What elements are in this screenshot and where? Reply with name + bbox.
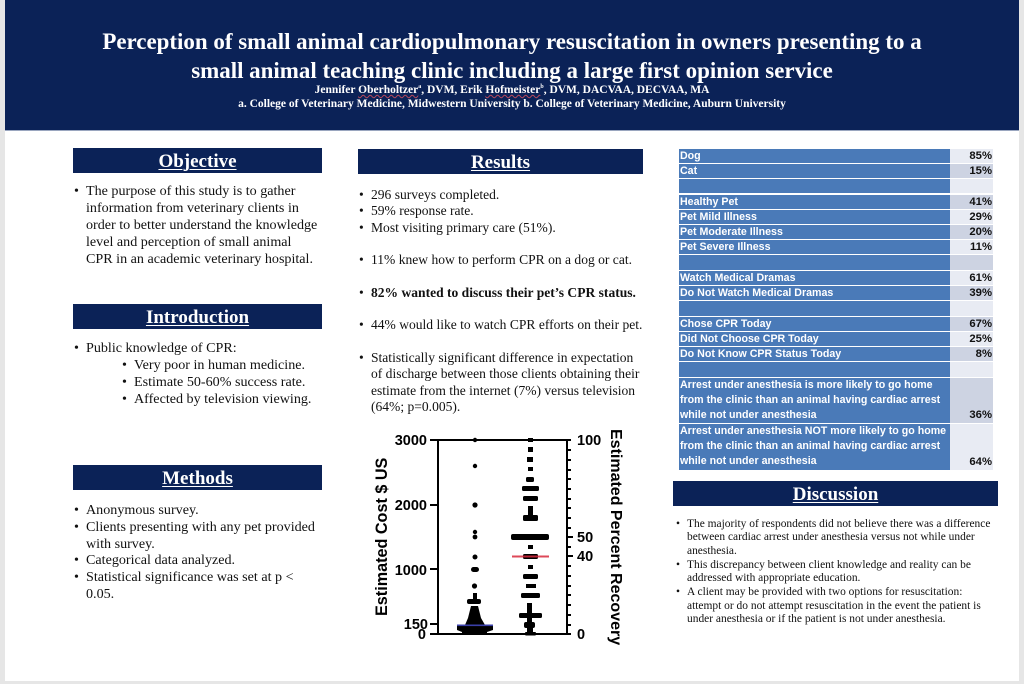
table: survey percentages: 20% [969,226,992,238]
table: survey percentages: Healthy Pet [680,196,738,208]
results text: 296 surveys completed. [371,187,499,202]
results text: 59% response rate. [371,203,474,218]
right axis numbers: 0 [577,627,585,643]
left axis title: Estimated Cost $ US [373,457,391,616]
discussion text [676,518,990,625]
heading: introduction [73,304,322,329]
axes [430,440,573,634]
methods text: Clients presenting with any pet provided [86,519,315,535]
introduction text: • [122,357,127,373]
table: survey percentages: Dog [680,150,701,162]
objective text: order to better understand the knowledge [86,217,317,233]
discussion text: The majority of respondents did not believe there was a difference [687,518,990,530]
heading: discussion: Discussion [793,484,878,505]
heading: methods [73,465,322,490]
right axis numbers: 40 [577,549,593,565]
methods text: 0.05. [86,586,114,602]
left axis numbers: 1000 [395,563,427,579]
table: survey percentages: Do Not Know CPR Status Today [680,348,841,360]
left axis numbers: 2000 [395,498,427,514]
objective text: The purpose of this study is to gather [86,183,295,199]
authors and affiliations: a. College of Veterinary Medicine, Midwestern University b. College of Veterinary Medicine, Auburn University [238,98,786,110]
table: survey percentages: from the clinic than an animal having cardiac arrest [680,394,940,406]
methods text: Anonymous survey. [86,502,199,518]
right axis numbers: 100 [577,433,601,449]
discussion text: • [676,518,680,530]
heading: objective: Objective [158,151,237,172]
results text: 11% knew how to perform CPR on a dog or cat. [371,252,632,267]
results text: • [359,203,364,218]
introduction text: • Public knowledge of CPR: [74,340,237,356]
table: survey percentages: Watch Medical Dramas [680,272,796,284]
objective text: level and perception of small animal [86,234,291,250]
authors and affiliations: Jennifer Oberholtzera, DVM, Erik Hofmeisterb, DVM, DACVAA, DECVAA, MA [315,84,709,96]
left axis numbers [395,433,428,643]
panel: methods [73,465,322,602]
right axis title: Estimated Percent Recovery [607,429,624,645]
table: survey percentages: 25% [969,333,992,345]
heading: results [358,149,643,174]
panel: objective [73,148,322,267]
table: survey percentages: Do Not Watch Medical Dramas [680,286,833,298]
table: survey percentages: while not under anesthesia [680,409,817,421]
recovery data points [511,438,549,636]
results text: • [359,220,364,235]
methods text: • [74,552,79,568]
discussion text: anesthesia. [687,545,737,557]
results text: Statistically significant difference in expectation [371,350,633,365]
introduction text: • [122,391,127,407]
results text: of discharge between those clients obtaining their [371,366,639,381]
introduction text: • [122,374,127,390]
introduction text: Estimate 50-60% success rate. [134,374,305,390]
table: survey percentages: 41% [969,196,992,208]
table: survey percentages: 36% [969,409,992,421]
results text: • [359,285,364,300]
table: survey percentages: 64% [969,456,992,468]
table: survey percentages: 15% [969,165,992,177]
methods text [74,502,315,602]
left axis numbers: 0 [418,627,426,643]
chart: estimated cost and percent recovery [373,429,624,646]
panel: introduction [73,304,322,407]
results text: • [359,187,364,202]
recovery median line [512,556,549,558]
objective text: • [74,183,79,199]
table: survey percentages: 8% [976,348,992,360]
heading: introduction: Introduction [146,307,249,328]
table: survey percentages: while not under anesthesia [680,455,817,467]
discussion text: A client may be provided with two options for resuscitation: [687,586,962,598]
right axis numbers [577,433,601,643]
table: survey percentages: Arrest under anesthesia is more likely to go home [680,379,932,391]
objective text: CPR in an academic veterinary hospital. [86,251,313,267]
table: survey percentages [679,148,993,470]
results text: 82% wanted to discuss their pet’s CPR status. [371,285,636,300]
discussion text: This discrepancy between client knowledge and reality can be [687,559,971,571]
introduction text: Affected by television viewing. [134,391,311,407]
heading: methods: Methods [162,468,233,489]
table: survey percentages: 85% [969,150,992,162]
header banner [5,0,1019,131]
heading: results: Results [471,152,530,173]
left axis numbers: 150 [404,617,428,633]
table: survey percentages: Arrest under anesthesia NOT more likely to go home [680,425,946,437]
results text: • [359,350,364,365]
panel: results [358,149,643,414]
methods text: with survey. [86,536,155,552]
methods text: • [74,502,79,518]
title: small animal teaching clinic including a large first opinion service [191,58,833,83]
table: survey percentages: 67% [969,318,992,330]
objective text: information from veterinary clients in [86,200,299,216]
introduction text: Very poor in human medicine. [134,357,305,373]
title: Perception of small animal cardiopulmonary resuscitation in owners presenting to a [102,29,922,54]
results text: • [359,252,364,267]
methods text: Categorical data analyzed. [86,552,235,568]
cost data points [457,438,493,635]
results text: • [359,317,364,332]
discussion text: • [676,586,680,598]
table: survey percentages: Did Not Choose CPR Today [680,333,819,345]
table: survey percentages: Pet Severe Illness [680,241,771,253]
table: survey percentages: 29% [969,210,992,222]
introduction text [74,340,311,407]
discussion text: addressed with appropriate education. [687,572,860,584]
table: survey percentages: Chose CPR Today [680,318,771,330]
heading: objective [73,148,322,173]
methods text: Statistical significance was set at p < [86,569,294,585]
table: survey percentages: 39% [969,286,992,298]
results text: estimate from the internet (7%) versus television [371,383,635,398]
results text: (64%; p=0.005). [371,399,460,414]
table: survey percentages: Cat [680,165,697,177]
cost median line [457,624,493,626]
discussion text: between cardiac arrest under anesthesia versus not while under [687,531,975,543]
table: survey percentages: 61% [969,272,992,284]
table: survey percentages: from the clinic than an animal having cardiac arrest [680,440,940,452]
left axis numbers: 3000 [395,433,427,449]
authors and affiliations [238,84,786,110]
methods text: • [74,519,79,535]
objective text [74,183,317,267]
results text: Most visiting primary care (51%). [371,220,556,235]
table: survey percentages: 11% [970,241,992,253]
methods text: • [74,569,79,585]
discussion text: • [676,559,680,571]
discussion text: under anesthesia or if the patient is not under anesthesia. [687,613,946,625]
results text [359,187,642,414]
panel: discussion [673,481,998,625]
heading: discussion [673,481,998,506]
results text: 44% would like to watch CPR efforts on their pet. [371,317,642,332]
title [102,29,922,83]
table: survey percentages: Pet Moderate Illness [680,226,783,238]
right axis numbers: 50 [577,530,593,546]
discussion text: attempt or do not attempt resuscitation in the event the patient is [687,600,981,612]
table: survey percentages: Pet Mild Illness [680,210,757,222]
